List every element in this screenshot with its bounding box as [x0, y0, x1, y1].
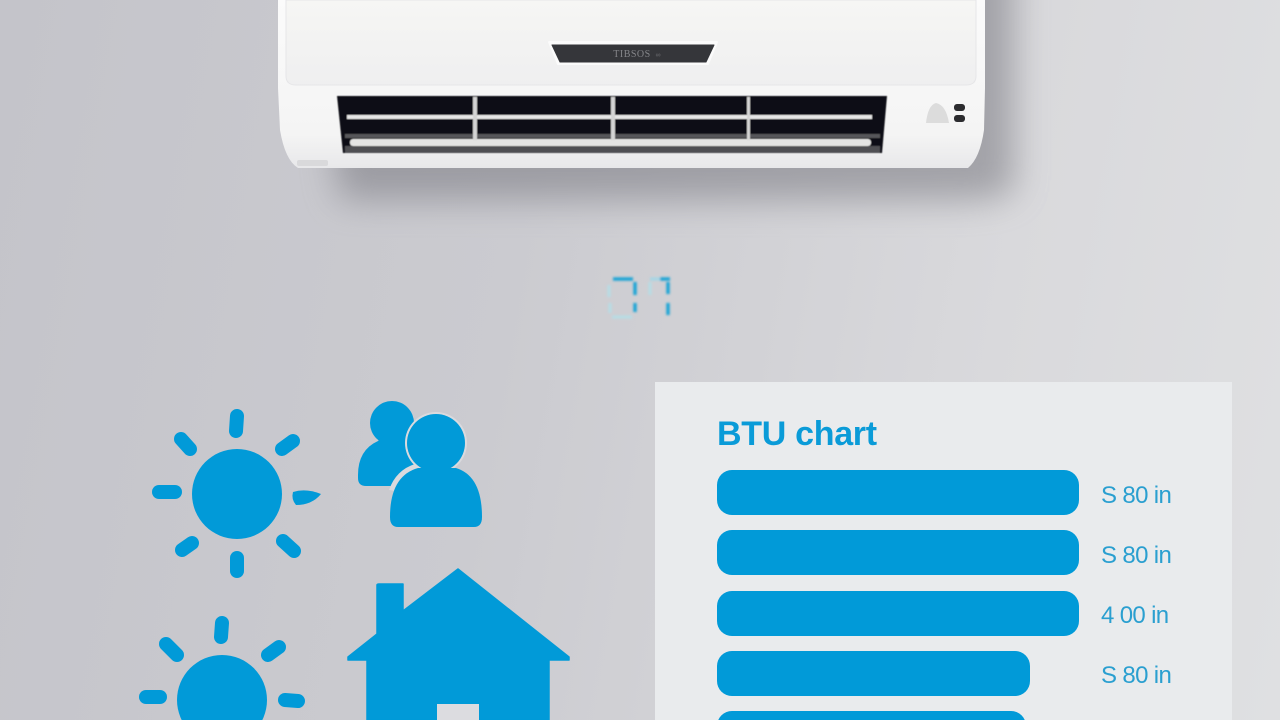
control buttons: [926, 103, 965, 123]
display panel: TIBSOS: [613, 49, 651, 60]
chart heading: BTU chart: [717, 415, 877, 453]
display panel: ∞: [656, 52, 660, 59]
value label 3: 4 00 in: [1101, 602, 1169, 629]
icon: sun: [159, 416, 321, 571]
bar row 2: [717, 530, 1079, 575]
bar row 5: [717, 711, 1026, 720]
bar row 1: [717, 470, 1079, 515]
icon: house: [348, 569, 569, 720]
air vent: [337, 96, 887, 153]
value label 1: S 80 in: [1101, 482, 1171, 509]
icon: people: [358, 401, 482, 527]
icon: sun: [146, 623, 298, 720]
bar row 3: [717, 591, 1079, 636]
air conditioner unit: [278, 0, 1031, 217]
panel: BTU chart: [655, 382, 1232, 720]
logo mark: [297, 160, 328, 166]
bar row 4: [717, 651, 1030, 696]
value label 2: S 80 in: [1101, 542, 1171, 569]
value label 4: S 80 in: [1101, 662, 1171, 689]
display panel: [549, 42, 717, 64]
